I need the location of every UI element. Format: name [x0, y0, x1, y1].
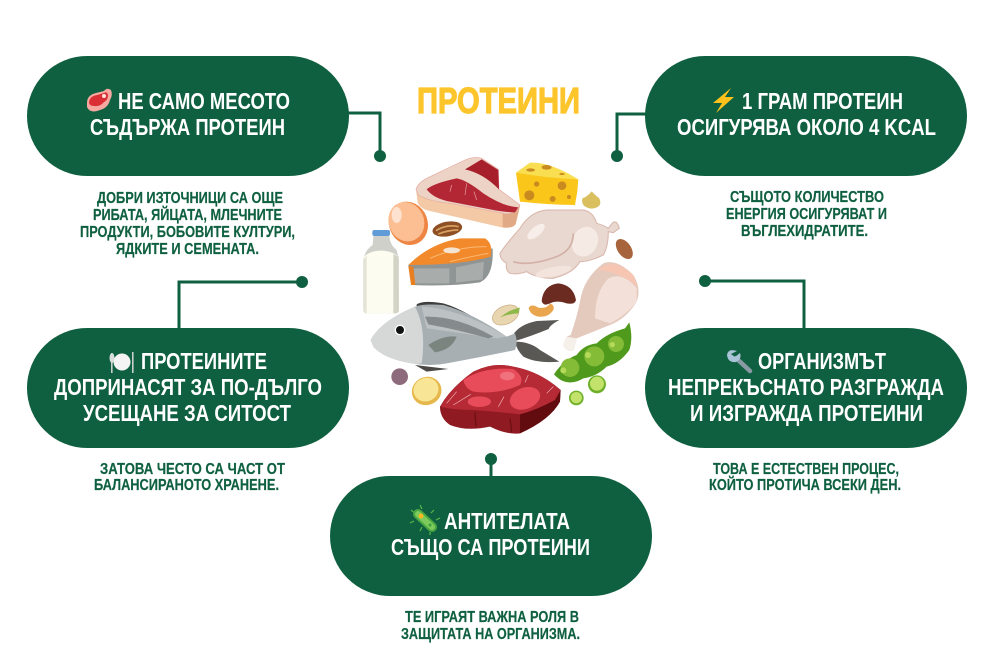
connector: top right: [611, 114, 650, 162]
heading: top left: СЪДЪРЖА ПРОТЕИН: [90, 114, 285, 140]
panel: satiety: [27, 276, 349, 494]
heading: bottom: АНТИТЕЛАТА: [444, 508, 570, 534]
heading: middle right: [668, 348, 944, 426]
icon: almond: [612, 236, 636, 262]
icon: cashew: [529, 304, 554, 317]
heading: bottom: СЪЩО СА ПРОТЕИНИ: [391, 534, 590, 560]
heading: middle left: ПРОТЕИНИТЕ: [141, 348, 267, 374]
icon: kidney bean: [542, 283, 576, 305]
heading: top left: НЕ САМО МЕСОТО: [118, 88, 290, 114]
text: top right description: ВЪГЛЕХИДРАТИТЕ.: [741, 223, 868, 240]
text: middle right description: КОЙТО ПРОТИЧА ВСЕКИ ДЕН.: [709, 476, 901, 494]
icon: chicken drumstick: [563, 262, 639, 351]
icon: chicken: [500, 210, 619, 280]
icon: red meat: [440, 365, 561, 434]
panel: body rebuilds proteins: [645, 275, 967, 494]
icon: lightning: [713, 88, 734, 113]
icon: t-bone steak: [416, 157, 520, 228]
icon: pea pod: [554, 322, 631, 405]
text: top right description: СЪЩОТО КОЛИЧЕСТВО: [730, 189, 884, 206]
pill: top left: [27, 56, 349, 176]
text: top left description: ДОБРИ ИЗТОЧНИЦИ СА ОЩЕ: [97, 190, 283, 207]
heading: middle right: И ИЗГРАЖДА ПРОТЕИНИ: [690, 400, 923, 426]
text: bottom description: [401, 609, 580, 643]
heading: middle left: УСЕЩАНЕ ЗА СИТОСТ: [83, 400, 292, 426]
upper foods: [363, 157, 636, 313]
panel: meat is not the only source: [27, 56, 386, 258]
heading: middle left: [54, 348, 322, 426]
panel: 1 gram of protein: [611, 56, 967, 240]
icon: pecan: [431, 219, 463, 239]
icon: microbe: [410, 505, 440, 535]
heading: middle left: ДОПРИНАСЯТ ЗА ПО-ДЪЛГО: [54, 374, 322, 400]
text: top left description: ЯДКИТЕ И СЕМЕНАТА.: [116, 241, 259, 258]
icon: plate and cutlery: [110, 352, 134, 373]
illustration: protein foods: [363, 157, 639, 434]
text: middle right description: ТОВА Е ЕСТЕСТВЕН ПРОЦЕС,: [713, 461, 899, 478]
text: top left description: РИБАТА, ЯЙЦАТА, МЛЕЧНИТЕ: [93, 206, 282, 224]
connector: middle left: [179, 276, 308, 332]
text: top left description: [80, 190, 295, 258]
text: bottom description: ТЕ ИГРАЯТ ВАЖНА РОЛЯ В: [405, 609, 579, 626]
heading: top right: ОСИГУРЯВА ОКОЛО 4 KCAL: [677, 114, 936, 140]
text: top right description: [726, 189, 887, 240]
heading: bottom: [391, 508, 590, 560]
connector: middle right: [699, 275, 804, 332]
text: middle left description: [94, 461, 285, 494]
icon: wrench: [727, 350, 750, 371]
text: top left description: ПРОДУКТИ, БОБОВИТЕ КУЛТУРИ,: [80, 224, 295, 241]
icon: cheese: [516, 163, 578, 205]
text: top right description: ЕНЕРГИЯ ОСИГУРЯВАТ И: [726, 206, 887, 223]
text: bottom description: ЗАЩИТАТА НА ОРГАНИЗМА.: [401, 626, 580, 643]
title: ПРОТЕИНИ: [417, 80, 580, 121]
pill: middle left: [27, 328, 349, 448]
icon: egg: [382, 196, 434, 251]
heading: top left: [90, 88, 290, 140]
icon: meat: [87, 89, 112, 111]
pill: bottom: [330, 476, 652, 596]
pill: top right: [645, 56, 967, 176]
lower foods: [371, 262, 639, 434]
icon: fish: [371, 302, 559, 372]
connector: top left: [345, 113, 386, 162]
icon: yellow bean: [407, 372, 446, 410]
icon: milk bottle: [363, 230, 399, 313]
connector: bottom: [485, 453, 497, 480]
text: middle left description: БАЛАНСИРАНОТО ХРАНЕНЕ.: [94, 477, 279, 494]
text: middle left description: ЗАТОВА ЧЕСТО СА ЧАСТ ОТ: [100, 461, 285, 478]
pill: middle right: [645, 328, 967, 448]
icon: purple bean: [391, 368, 408, 385]
panel: antibodies: [330, 453, 652, 643]
heading: top right: [677, 88, 936, 140]
icon: hazelnut: [582, 191, 600, 209]
icon: salmon steak: [408, 238, 493, 285]
heading: middle right: ОРГАНИЗМЪТ: [758, 348, 886, 374]
icon: pistachio: [489, 301, 522, 329]
heading: top right: 1 ГРАМ ПРОТЕИН: [742, 88, 903, 114]
text: middle right description: [709, 461, 901, 494]
